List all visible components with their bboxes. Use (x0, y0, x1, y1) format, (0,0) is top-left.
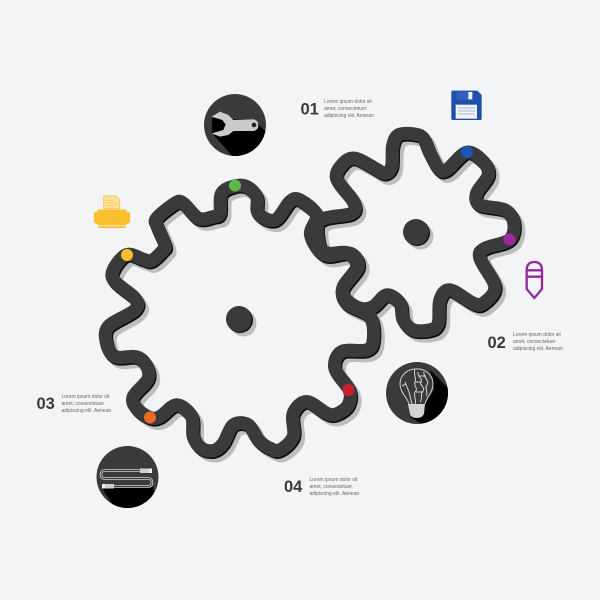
text block 02: adipiscing elit. Aenean (513, 346, 563, 352)
text block 04: amet, consectetuer (310, 484, 352, 490)
icon: floppy disk (451, 91, 482, 120)
large gear hub (226, 306, 256, 336)
marker: green (229, 180, 241, 192)
marker: red (342, 384, 354, 396)
small gear outline (317, 133, 514, 331)
text block 04: Lorem ipsum dolor sit (310, 477, 358, 483)
marker: blue (461, 146, 473, 158)
text block 02: Lorem ipsum dolor sit (513, 332, 561, 338)
large gear outline (105, 185, 374, 451)
step 03 (36, 394, 111, 414)
small gear hub (403, 219, 434, 250)
number 03: 03 (36, 395, 55, 413)
number 01: 01 (300, 100, 319, 118)
text block 01: adipiscing elit. Aenean (324, 113, 374, 119)
number 04: 04 (284, 478, 303, 496)
step 01 (300, 99, 374, 119)
step 02 (488, 332, 563, 352)
icon: wrench badge (204, 94, 266, 156)
text block 01: amet, consectetuer (324, 106, 367, 112)
text block 02: amet, consectetuer (513, 339, 556, 345)
text block 01: Lorem ipsum dolor sit (324, 99, 372, 105)
icon: printer (94, 196, 130, 228)
text block 04: adipiscing elit. Aenean (310, 491, 359, 497)
icon: cables badge (96, 446, 158, 508)
marker: purple (504, 234, 516, 246)
marker: yellow (121, 249, 133, 261)
step 04 (284, 477, 359, 497)
text block 03: Lorem ipsum dolor sit (62, 394, 110, 400)
icon: pencil (527, 262, 542, 298)
marker: orange (144, 412, 156, 424)
number 02: 02 (488, 334, 506, 352)
text block 03: amet, consectetuer (62, 401, 104, 407)
gears diagram (105, 133, 519, 456)
text block 03: adipiscing elit. Aenean (62, 408, 111, 414)
icon: light bulb badge (386, 362, 448, 424)
